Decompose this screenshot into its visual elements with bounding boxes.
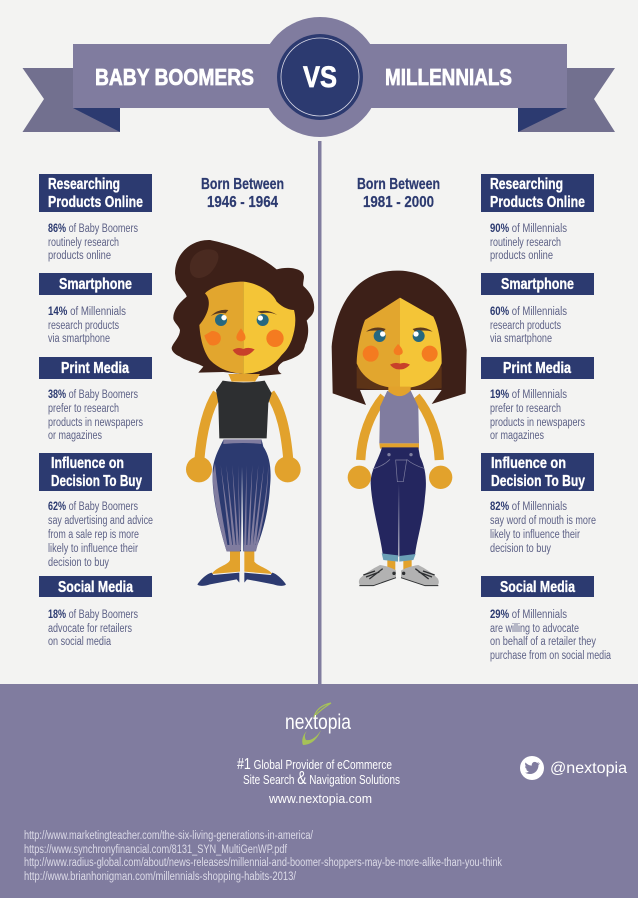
source links: http://www.radius-global.com/about/news-releases/millennial-and-boomer-shoppers-may-be-more-alike-than-you-think <box>24 857 502 869</box>
source links <box>24 830 502 883</box>
panel: boomers researching online <box>39 174 152 262</box>
source links: https://www.synchronyfinancial.com/8131_SYN_MultiGenWP.pdf <box>24 844 288 856</box>
panel: millennials print media <box>481 357 594 442</box>
panel: millennials social media: 29% of Millennials <box>490 609 567 621</box>
panel: millennials social media: Social Media <box>500 579 575 596</box>
born between: boomers <box>201 176 284 211</box>
panel: millennials print media: 19% of Millennials <box>490 389 567 401</box>
twitter handle: @nextopia <box>550 760 627 777</box>
tagline: Site Search & Navigation Solutions <box>243 768 400 788</box>
panel: boomers social media: 18% of Baby Boomers <box>48 609 138 621</box>
panel: boomers social media: advocate for retailers <box>48 623 132 635</box>
panel: millennials smartphone: via smartphone <box>490 333 552 345</box>
born between: boomers: Born Between <box>201 176 284 193</box>
panel: boomers print media: 38% of Baby Boomers <box>48 389 138 401</box>
panel: boomers smartphone: research products <box>48 320 119 332</box>
born between: millennials: Born Between <box>357 176 440 193</box>
panel: millennials smartphone: Smartphone <box>501 276 574 293</box>
panel: boomers researching online: Researching <box>48 176 120 193</box>
nextopia logo: nextopia <box>285 711 351 734</box>
panel: boomers smartphone: Smartphone <box>59 276 132 293</box>
figure: millennial woman <box>332 271 467 586</box>
twitter handle <box>520 756 627 780</box>
panel: millennials influence on decision: 82% of Millennials <box>490 501 567 513</box>
panel: millennials print media: prefer to research <box>490 403 561 415</box>
panel: millennials researching online: Products Online <box>490 194 585 211</box>
panel: boomers smartphone: via smartphone <box>48 333 110 345</box>
panel: boomers social media: Social Media <box>58 579 133 596</box>
panel: millennials researching online <box>481 174 594 262</box>
title ribbon: VS <box>303 61 337 94</box>
panel: boomers influence on decision: decision to buy <box>48 557 109 569</box>
panel: boomers researching online: 86% of Baby Boomers <box>48 223 138 235</box>
panel: millennials social media <box>481 576 611 662</box>
title ribbon <box>22 17 615 137</box>
panel: millennials influence on decision: say word of mouth is more <box>490 515 596 527</box>
tagline <box>237 756 400 788</box>
panel: millennials print media: Print Media <box>503 360 571 377</box>
born between: boomers: 1946 - 1964 <box>207 194 278 211</box>
title ribbon: MILLENNIALS <box>385 64 512 90</box>
website: www.nextopia.com <box>268 791 372 806</box>
source links: http://www.marketingteacher.com/the-six-living-generations-in-america/ <box>24 830 314 842</box>
panel: boomers smartphone <box>39 273 152 345</box>
panel: millennials influence on decision: Influence on <box>491 455 566 472</box>
figure: baby boomer woman <box>172 240 314 586</box>
panel: millennials influence on decision: decision to buy <box>490 543 551 555</box>
panel: boomers print media: Print Media <box>61 360 129 377</box>
panel: boomers print media: products in newspapers <box>48 417 143 429</box>
panel: boomers smartphone: 14% of Millennials <box>48 306 126 318</box>
panel: millennials researching online: routinely research <box>490 237 561 249</box>
panel: millennials researching online: Researching <box>490 176 563 193</box>
panel: boomers influence on decision: 62% of Baby Boomers <box>48 501 138 513</box>
panel: millennials smartphone: research products <box>490 320 561 332</box>
source links: http://www.brianhonigman.com/millennials-shopping-habits-2013/ <box>24 871 297 883</box>
panel: boomers researching online: products online <box>48 250 111 262</box>
footer panel <box>0 684 638 898</box>
panel: millennials influence on decision: Decision To Buy <box>491 473 585 490</box>
panel: boomers influence on decision: Influence on <box>51 455 124 472</box>
panel: boomers influence on decision: from a sale rep is more <box>48 529 139 541</box>
panel: millennials print media: products in newspapers <box>490 417 585 429</box>
panel: millennials researching online: 90% of Millennials <box>490 223 567 235</box>
panel: millennials social media: on behalf of a retailer they <box>490 636 596 648</box>
panel: boomers print media <box>39 357 152 442</box>
panel: boomers influence on decision: likely to influence their <box>48 543 138 555</box>
panel: boomers influence on decision: Decision To Buy <box>51 473 142 490</box>
panel: boomers researching online: routinely research <box>48 237 119 249</box>
panel: boomers print media: prefer to research <box>48 403 119 415</box>
panel: boomers social media: on social media <box>48 636 111 648</box>
panel: boomers print media: or magazines <box>48 430 102 442</box>
born between: millennials: 1981 - 2000 <box>363 194 434 211</box>
panel: millennials social media: are willing to advocate <box>490 623 579 635</box>
tagline: #1 Global Provider of eCommerce <box>237 756 392 773</box>
panel: millennials smartphone: 60% of Millennials <box>490 306 567 318</box>
panel: millennials smartphone <box>481 273 594 345</box>
panel: millennials influence on decision <box>481 453 596 555</box>
panel: millennials print media: or magazines <box>490 430 544 442</box>
panel: boomers researching online: Products Online <box>48 194 143 211</box>
panel: millennials researching online: products online <box>490 250 553 262</box>
panel: boomers influence on decision: say advertising and advice <box>48 515 153 527</box>
born between: millennials <box>357 176 440 211</box>
title ribbon: BABY BOOMERS <box>95 64 254 90</box>
panel: boomers social media <box>39 576 152 648</box>
panel: boomers influence on decision <box>39 453 153 569</box>
panel: millennials influence on decision: likely to influence their <box>490 529 580 541</box>
nextopia logo <box>285 703 351 745</box>
